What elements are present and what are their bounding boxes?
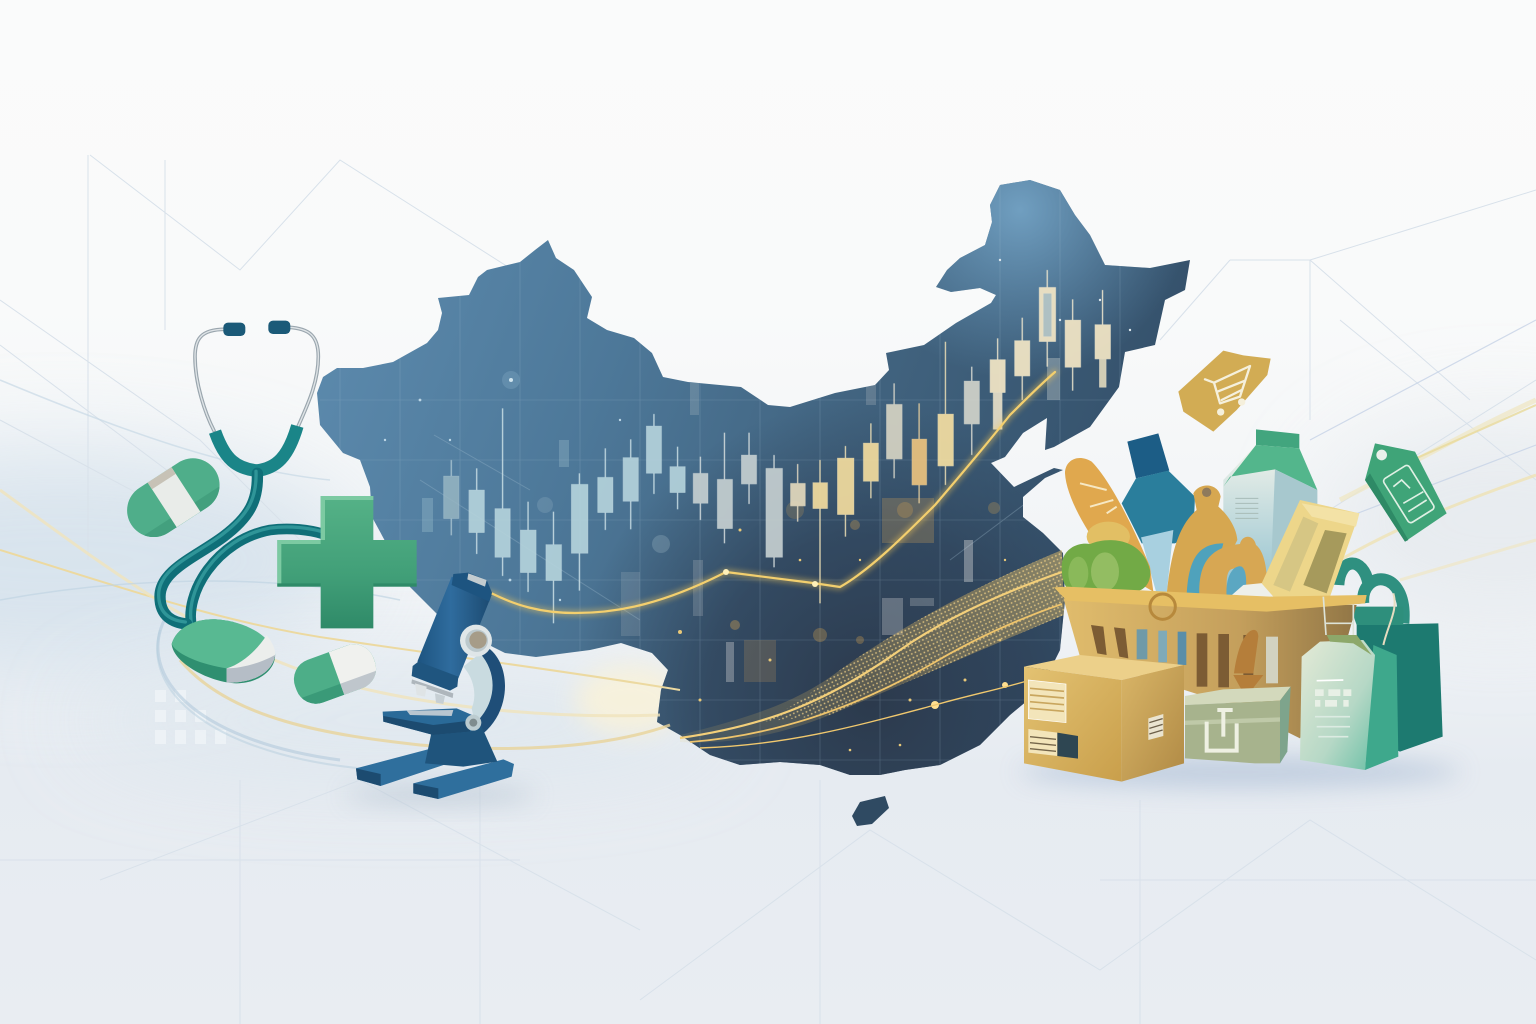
- icon: milk carton: [1223, 429, 1317, 597]
- right streak lines: [1310, 320, 1536, 580]
- golden stream band: [680, 550, 1064, 748]
- icon: stethoscope chest piece: [172, 619, 275, 683]
- icon: floating cart tag: [1178, 351, 1271, 432]
- icon: stethoscope: [159, 321, 323, 628]
- icon: blue bottle: [1122, 433, 1195, 594]
- icon: lower capsule: [294, 644, 376, 704]
- icon: front shopping bag: [1300, 597, 1398, 770]
- island of Hainan: [852, 796, 889, 826]
- microscope feet: [356, 748, 463, 786]
- icon: small green box: [1185, 687, 1291, 763]
- microscope stage: [383, 708, 480, 735]
- icon: parcel box: [1024, 655, 1184, 782]
- sparkle dots: [384, 259, 1131, 751]
- icon: medical cross: [277, 496, 417, 628]
- icon: floating green price tag: [1365, 443, 1447, 542]
- ghost chart blocks: [422, 358, 1060, 682]
- medical group: [117, 321, 514, 799]
- icon: upper capsule: [127, 458, 220, 537]
- icon: microscope: [356, 573, 514, 799]
- candlestick chart: [444, 270, 1111, 623]
- microscope knob: [460, 625, 492, 657]
- icon: yellow packet: [1262, 500, 1359, 597]
- left swoosh lines: [0, 380, 680, 770]
- microscope neck: [425, 727, 497, 767]
- icon: gold bottles: [1167, 486, 1280, 597]
- golden trend line: [491, 372, 1055, 613]
- icon: back shopping bag: [1338, 564, 1443, 752]
- background grid squares: [155, 690, 226, 744]
- microscope tube: [417, 577, 492, 678]
- map grid lines: [320, 185, 1120, 775]
- microscope arm: [467, 647, 505, 733]
- map of China: [317, 180, 1190, 775]
- shopping group: [1024, 351, 1447, 782]
- icon: basket: [1054, 587, 1367, 738]
- icon: green pepper: [1062, 522, 1150, 592]
- icon: baguette: [1065, 458, 1153, 592]
- shadows under objects: [345, 756, 1460, 804]
